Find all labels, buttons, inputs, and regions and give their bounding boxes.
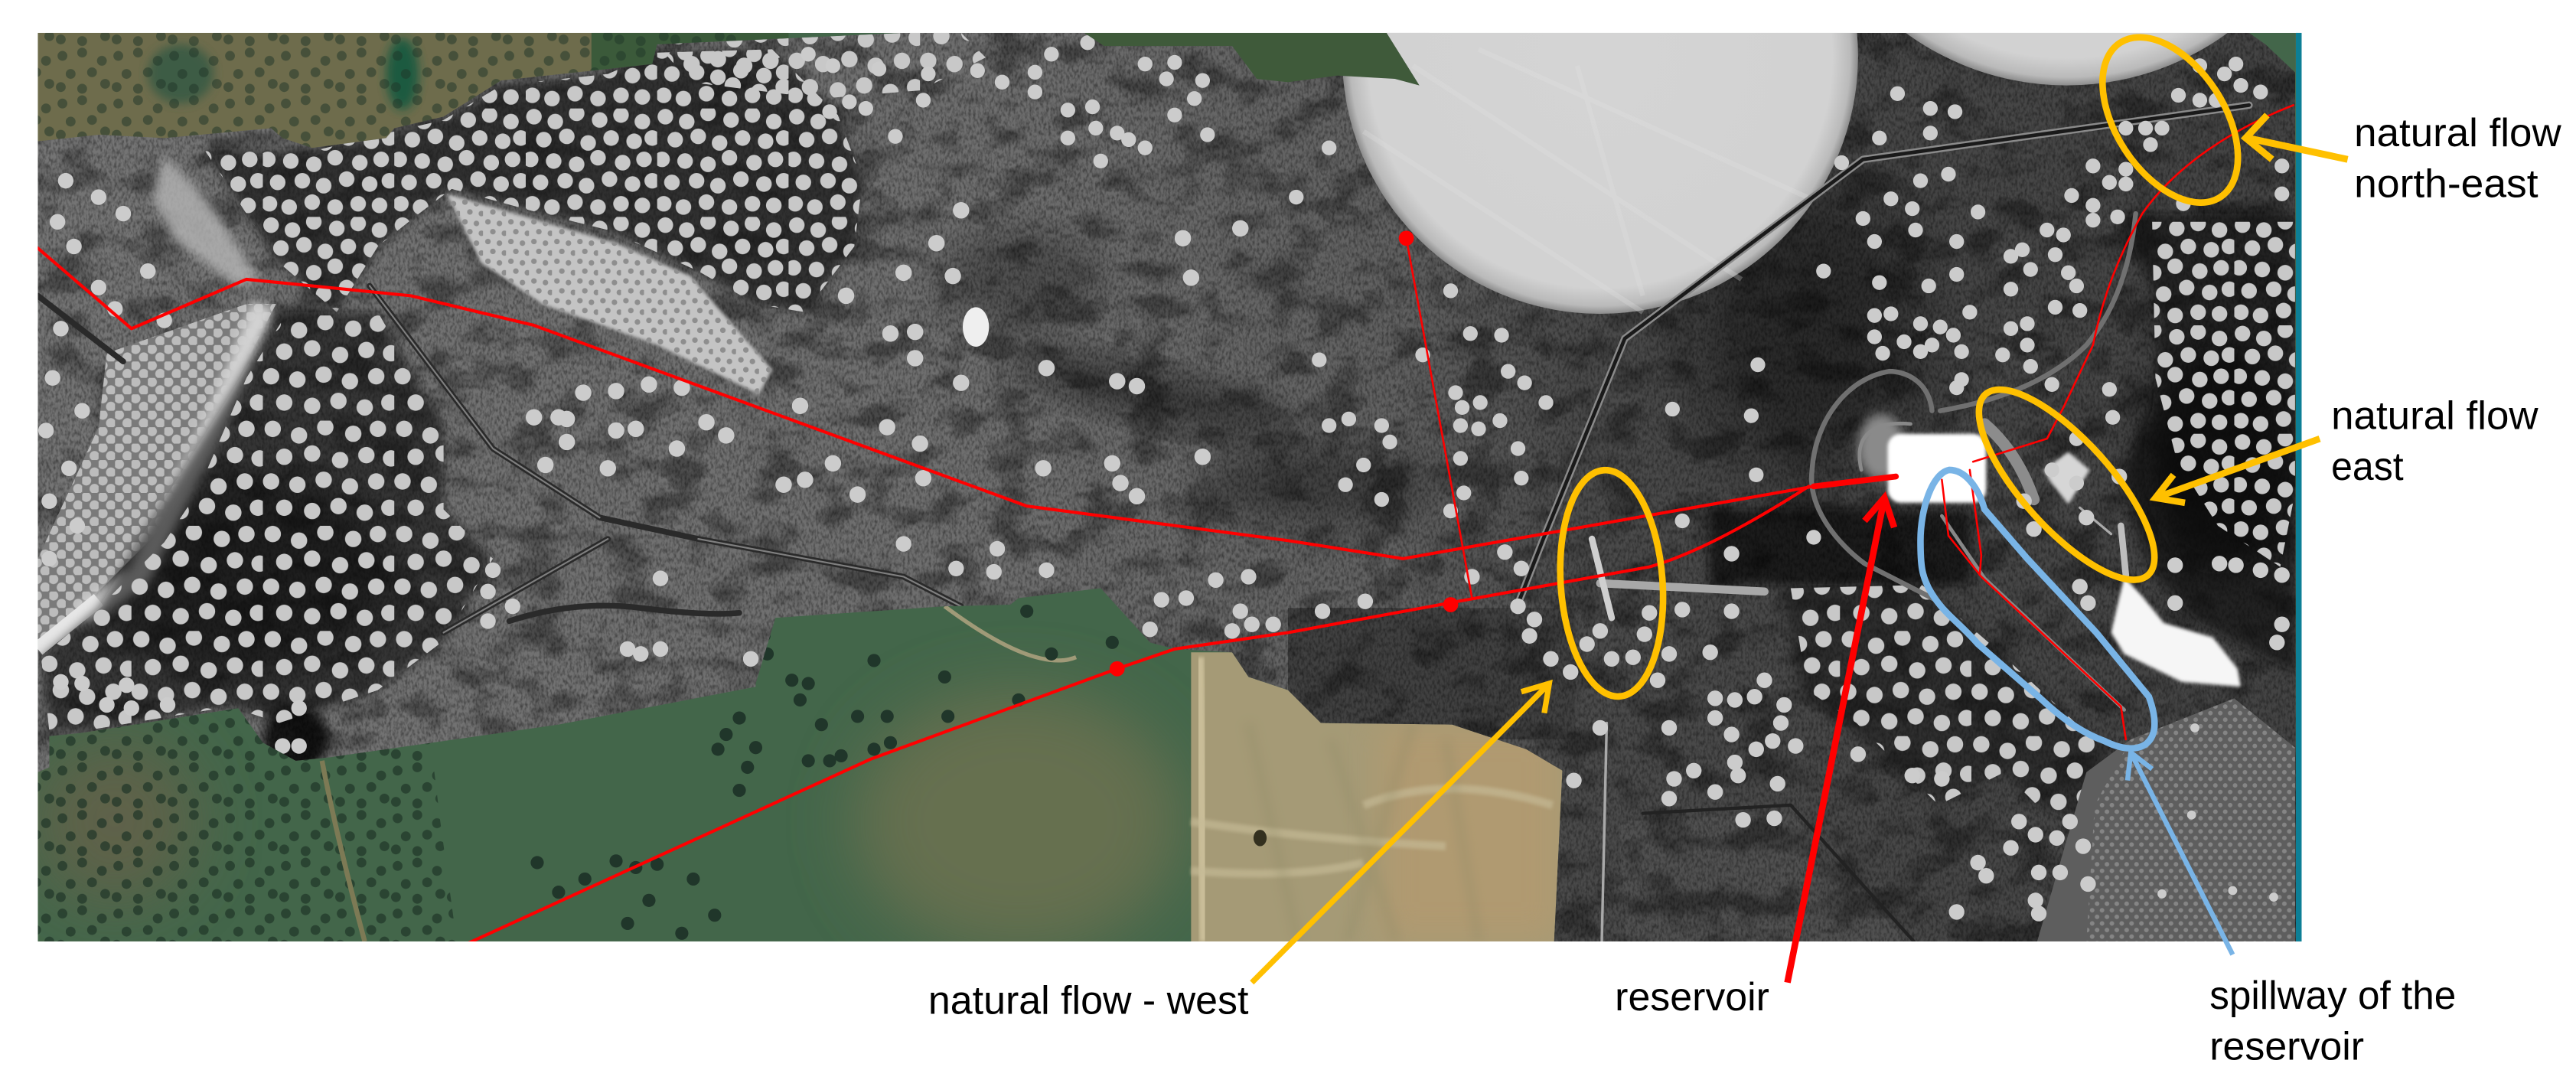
arrow: natural flow north-east (2246, 115, 2348, 159)
dense tree stand: south-east (1782, 585, 2111, 821)
eastern red line (1973, 105, 2294, 462)
label: natural flow east (2331, 393, 2539, 488)
roads and tracks (37, 105, 2249, 941)
circle: natural flow west (1553, 467, 1671, 700)
vertical red branch (1407, 238, 1472, 598)
pond south-east (2111, 576, 2241, 687)
label: natural flow north-east (2354, 110, 2561, 206)
tan plot (1191, 652, 1562, 941)
label: natural flow north-east: north-east (2354, 162, 2539, 206)
scattered trees (46, 43, 2282, 914)
label: reservoir: reservoir (1615, 974, 1769, 1019)
dense tree stand: north-west (205, 33, 986, 312)
dark mottling (99, 181, 2292, 772)
red survey lines (37, 105, 2294, 943)
teal map border (2296, 33, 2301, 941)
spillway red line (1942, 470, 2126, 739)
circle: natural flow east (1952, 364, 2181, 605)
reservoir bank (1858, 414, 1904, 480)
hilltop pond west (963, 307, 989, 347)
arrow: spillway (2128, 752, 2232, 954)
light tree band (153, 156, 772, 394)
circle: natural flow north-east (2075, 13, 2266, 227)
label: natural flow east: natural flow (2331, 393, 2539, 437)
label: natural flow north-east: natural flow (2354, 110, 2561, 155)
dense tree stand: east (2119, 214, 2295, 674)
outline: spillway of the reservoir (1920, 470, 2154, 749)
label: natural flow west: natural flow - west (928, 977, 1248, 1022)
label: spillway of the reservoir: spillway of the (2209, 973, 2456, 1017)
orchard strip (37, 304, 276, 649)
northern red line (37, 248, 1814, 559)
map image (33, 0, 2340, 953)
arrow: natural flow west (1252, 684, 1549, 983)
trees in green fields (537, 612, 1112, 933)
red survey dots (1110, 230, 1458, 677)
arrow: natural flow east (2155, 439, 2320, 503)
mottled terrain and grain (37, 33, 2297, 941)
bright flow patch (2043, 452, 2090, 504)
satellite imagery: green fields (33, 33, 2297, 953)
fine orchard texture (2037, 698, 2295, 941)
label: spillway of the reservoir (2209, 973, 2456, 1069)
southern red line (468, 486, 1808, 943)
dense tree stand: south-west (41, 312, 493, 731)
reservoir red link (1814, 477, 1896, 486)
reservoir water (1888, 434, 1986, 503)
grayscale thermal mosaic (37, 0, 2340, 941)
arrow: reservoir (1788, 498, 1894, 983)
label: natural flow east: east (2331, 444, 2404, 488)
label: spillway of the reservoir: reservoir (2209, 1024, 2364, 1069)
irrigation pivot circles (1342, 0, 2340, 314)
